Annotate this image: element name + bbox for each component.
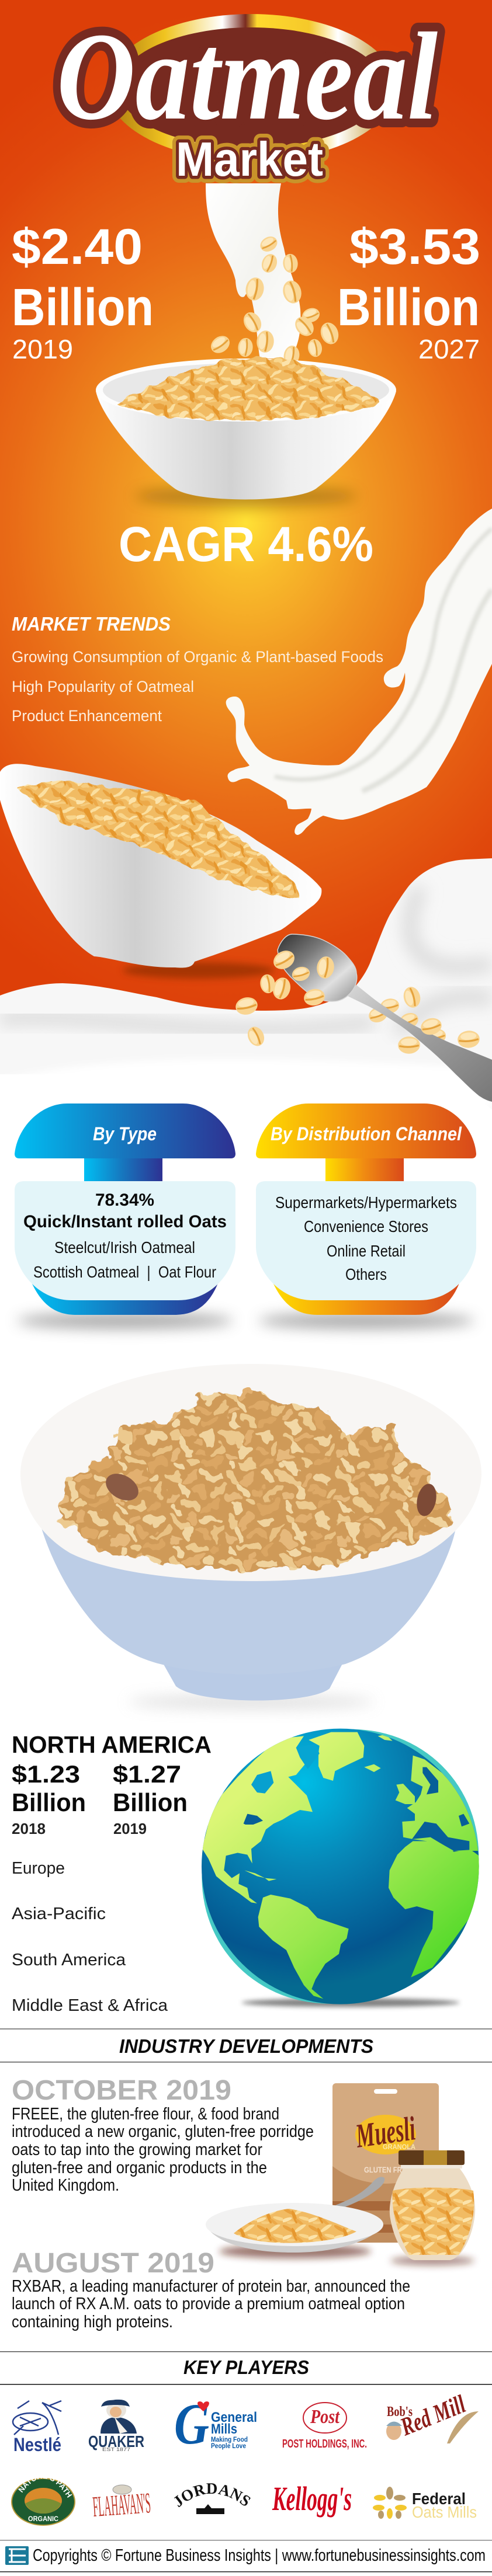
market value 2019: Billion: [12, 279, 154, 337]
jar: [390, 2150, 475, 2265]
body: type segments: [15, 1181, 235, 1300]
logo: Nature's Path: [11, 2478, 75, 2526]
stat: 2019 value: 2019: [113, 1820, 147, 1837]
stat: 2018 value: Billion: [12, 1788, 86, 1817]
milk splash: [226, 509, 492, 835]
logo: Nature's Path: NATURE'S PATH: [18, 2478, 72, 2498]
icon: globe: [202, 1728, 479, 2010]
plate of oats: [206, 2203, 383, 2258]
trend list: [12, 648, 383, 725]
divider: [0, 2540, 492, 2541]
heading: key players: KEY PLAYERS: [183, 2356, 309, 2378]
region list: Asia-Pacific: [12, 1905, 106, 1923]
illustration: granola bowl: [20, 1364, 481, 1709]
stat: 2018 value: 2018: [12, 1820, 46, 1837]
development: august 2019: launch of RX A.M. oats to provide a premium oatmeal option: [12, 2295, 405, 2313]
logo: Bob's Red Mill: [386, 2390, 479, 2443]
title badge: oatmeal market: [57, 6, 438, 186]
subtitle: Market: Market: [176, 132, 323, 186]
footer: [5, 2546, 486, 2565]
logo: Federal Oats Mills: [373, 2487, 477, 2521]
market trends: [12, 613, 383, 725]
pouch: GRANOLA: [383, 2143, 415, 2151]
heading: industry developments: INDUSTRY DEVELOPMENTS: [119, 2035, 373, 2057]
logo: Federal Oats Mills: Oats Mills: [412, 2503, 477, 2521]
trend list: Growing Consumption of Organic & Plant-based Foods: [12, 648, 383, 666]
region list: Europe: [12, 1859, 65, 1878]
stat: 2018 value: $1.23: [12, 1760, 80, 1788]
body: channel list: Others: [345, 1265, 387, 1283]
logo: General Mills: Making Food: [211, 2435, 248, 2443]
development: august 2019: AUGUST 2019: [12, 2248, 214, 2279]
logo: Bob's Red Mill: Bob's: [387, 2404, 413, 2420]
logo: Bob's Red Mill: Red Mill: [396, 2390, 470, 2442]
logo: Federal Oats Mills: Federal: [412, 2490, 466, 2508]
illustration: oat bowl with milk: [96, 357, 396, 507]
logo: Post Holdings: [282, 2403, 367, 2450]
market value 2027: [337, 219, 480, 364]
logo: General Mills: [174, 2391, 257, 2456]
market value 2019: [12, 219, 154, 364]
icon: fortune business insights logo: [5, 2546, 29, 2565]
header: by distribution channel: By Distribution Channel: [271, 1123, 462, 1144]
stat: 2019 value: $1.27: [113, 1760, 181, 1788]
body: channel list: Convenience Stores: [304, 1217, 428, 1235]
logo: Kellogg's: Kellogg's: [272, 2480, 352, 2518]
panel: regional data: [12, 1731, 212, 2015]
illustration: tilted oat bowl: [0, 764, 321, 979]
stat: 2019 value: [113, 1760, 188, 1837]
development: october 2019: [12, 2075, 314, 2195]
region list: [12, 1859, 168, 2015]
header: by type: By Type: [93, 1123, 157, 1144]
text: FLAHAVAN'S: [92, 2486, 152, 2523]
logo: General Mills: People Love: [211, 2442, 246, 2450]
logo: General Mills: Mills: [211, 2421, 237, 2437]
logo: Post Holdings: Post: [310, 2406, 340, 2428]
logo: Nestle: [13, 2401, 61, 2455]
logo: Nestle: Nestlé: [13, 2434, 61, 2455]
stat: CAGR: CAGR 4.6%: [119, 517, 373, 572]
development: october 2019: introduced a new organic, gluten-free porridge: [12, 2122, 314, 2141]
body: type segments: Scottish Oatmeal | Oat Flour: [33, 1263, 216, 1281]
body: type segments: Steelcut/Irish Oatmeal: [54, 1238, 195, 1256]
title: Oatmeal: Oatmeal: [57, 6, 438, 146]
logo: General Mills: G: [174, 2391, 209, 2456]
development: october 2019: oats to tap into the growing market for: [12, 2140, 262, 2159]
region list: Middle East & Africa: [12, 1996, 168, 2015]
body: type segments: Quick/Instant rolled Oats: [23, 1212, 227, 1231]
trend list: Product Enhancement: [12, 707, 162, 725]
falling oat flakes: [207, 234, 341, 367]
logo: Post Holdings: POST HOLDINGS, INC.: [282, 2438, 367, 2450]
illustration: spoon with oats: [234, 934, 492, 1102]
divider: [0, 2351, 492, 2352]
logo: Quaker: [88, 2400, 144, 2452]
market value 2019: 2019: [12, 334, 73, 364]
market value 2027: 2027: [418, 334, 480, 364]
heading: north america: NORTH AMERICA: [12, 1731, 212, 1758]
logo: Nature's Path: ORGANIC: [28, 2515, 58, 2523]
pouch: Muesli: [353, 2109, 418, 2155]
divider: [0, 2028, 492, 2030]
logo: Quaker: EST 1877: [102, 2447, 131, 2452]
development: august 2019: RXBAR, a leading manufacturer of protein bar, announced the: [12, 2277, 410, 2296]
logo: Jordans: JORDANS: [174, 2483, 251, 2507]
divider: [0, 2571, 492, 2572]
development: october 2019: FREEE, the gluten-free flour, & food brand: [12, 2105, 279, 2124]
logo: Quaker: QUAKER: [88, 2432, 144, 2450]
milk pour stream: [206, 183, 300, 358]
body: channel list: Supermarkets/Hypermarkets: [275, 1193, 457, 1212]
development: october 2019: gluten-free and organic products in the: [12, 2159, 267, 2177]
logo: Flahavan's: [92, 2485, 152, 2523]
stat: 2019 value: Billion: [113, 1788, 188, 1817]
header: by distribution channel: [256, 1103, 476, 1181]
development: august 2019: [12, 2248, 410, 2331]
development: august 2019: containing high proteins.: [12, 2313, 173, 2331]
panel: hero orange background: [0, 0, 492, 1074]
development: october 2019: OCTOBER 2019: [12, 2075, 231, 2106]
stat: 2018 value: [12, 1760, 86, 1837]
body: type segments: 78.34%: [95, 1190, 154, 1210]
market value 2027: $3.53: [349, 219, 480, 275]
logo: General Mills: General: [211, 2410, 257, 2425]
illustration: muesli products: [206, 2083, 475, 2265]
development: october 2019: United Kingdom.: [12, 2176, 119, 2195]
milk wave: [0, 858, 492, 1074]
pouch: [332, 2083, 439, 2243]
panel: by type: [15, 1103, 235, 1329]
panel: by distribution channel: [256, 1103, 476, 1329]
subtitle: Market: Market: [176, 132, 323, 186]
market value 2019: $2.40: [12, 219, 143, 275]
pouch: GLUTEN FREE: [364, 2165, 411, 2174]
gold oval emblem: [107, 14, 396, 161]
region list: South America: [12, 1951, 126, 1969]
spoon: [314, 2177, 384, 2218]
heading: market trends: MARKET TRENDS: [12, 613, 171, 635]
trend list: High Popularity of Oatmeal: [12, 678, 194, 695]
body: channel list: [256, 1181, 476, 1300]
body: channel list: Online Retail: [327, 1242, 406, 1260]
header: by type: [15, 1103, 235, 1181]
